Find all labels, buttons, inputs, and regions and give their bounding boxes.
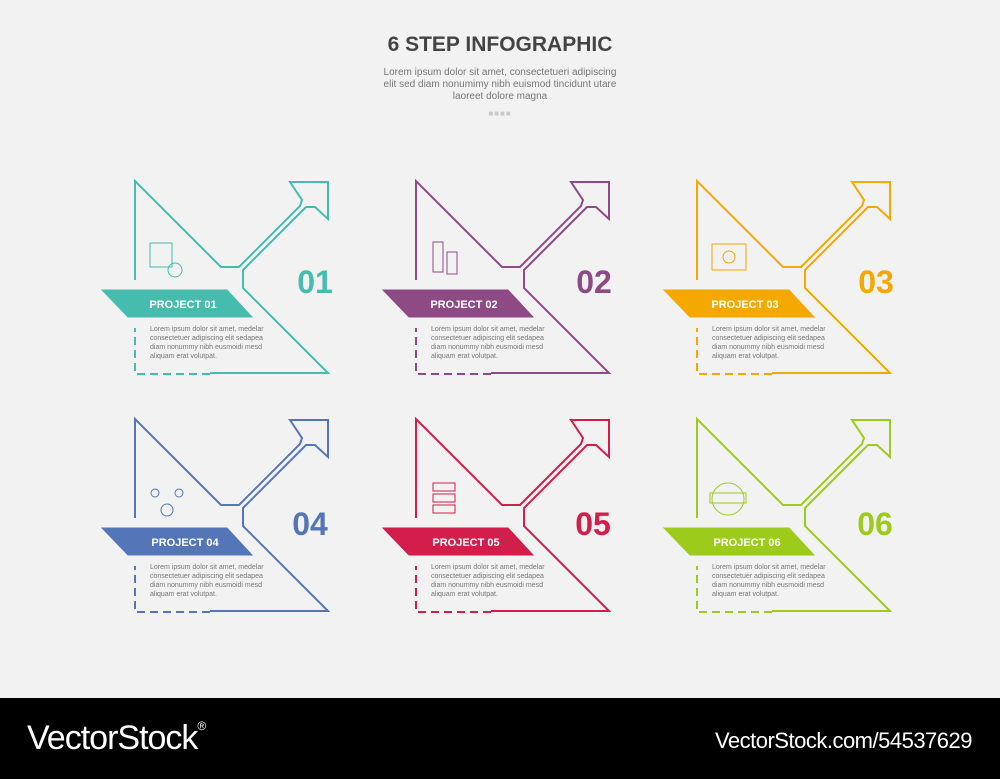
step 02: 02: [576, 264, 612, 300]
step 03: [664, 181, 894, 374]
subtitle: laoreet dolore magna: [453, 91, 547, 102]
step 04: 04: [292, 506, 328, 542]
logo: VectorStock®: [27, 719, 205, 757]
step 04: [102, 419, 328, 612]
subtitle: Lorem ipsum dolor sit amet, consectetueri adipiscing: [384, 67, 616, 78]
step 05: [383, 419, 611, 612]
subtitle: [384, 67, 616, 102]
step 06: [664, 419, 893, 612]
step 04: PROJECT 04: [151, 537, 220, 549]
image id: VectorStock.com/54537629: [715, 728, 972, 753]
step 01: [102, 181, 333, 374]
dots: ■■■■: [488, 109, 512, 118]
step 03: PROJECT 03: [711, 299, 779, 311]
step 05: 05: [575, 506, 611, 542]
step 02: [383, 181, 612, 374]
step 03: 03: [858, 264, 894, 300]
subtitle: elit sed diam nonumimy nibh euismod tincidunt utare: [384, 79, 616, 90]
step 06: PROJECT 06: [713, 537, 781, 549]
step 01: 01: [297, 264, 333, 300]
step 02: PROJECT 02: [430, 299, 498, 311]
footer bar: [0, 698, 1000, 779]
step 01: PROJECT 01: [149, 299, 217, 311]
step 06: 06: [857, 506, 893, 542]
title: 6 STEP INFOGRAPHIC: [388, 33, 612, 56]
step 05: PROJECT 05: [432, 537, 500, 549]
